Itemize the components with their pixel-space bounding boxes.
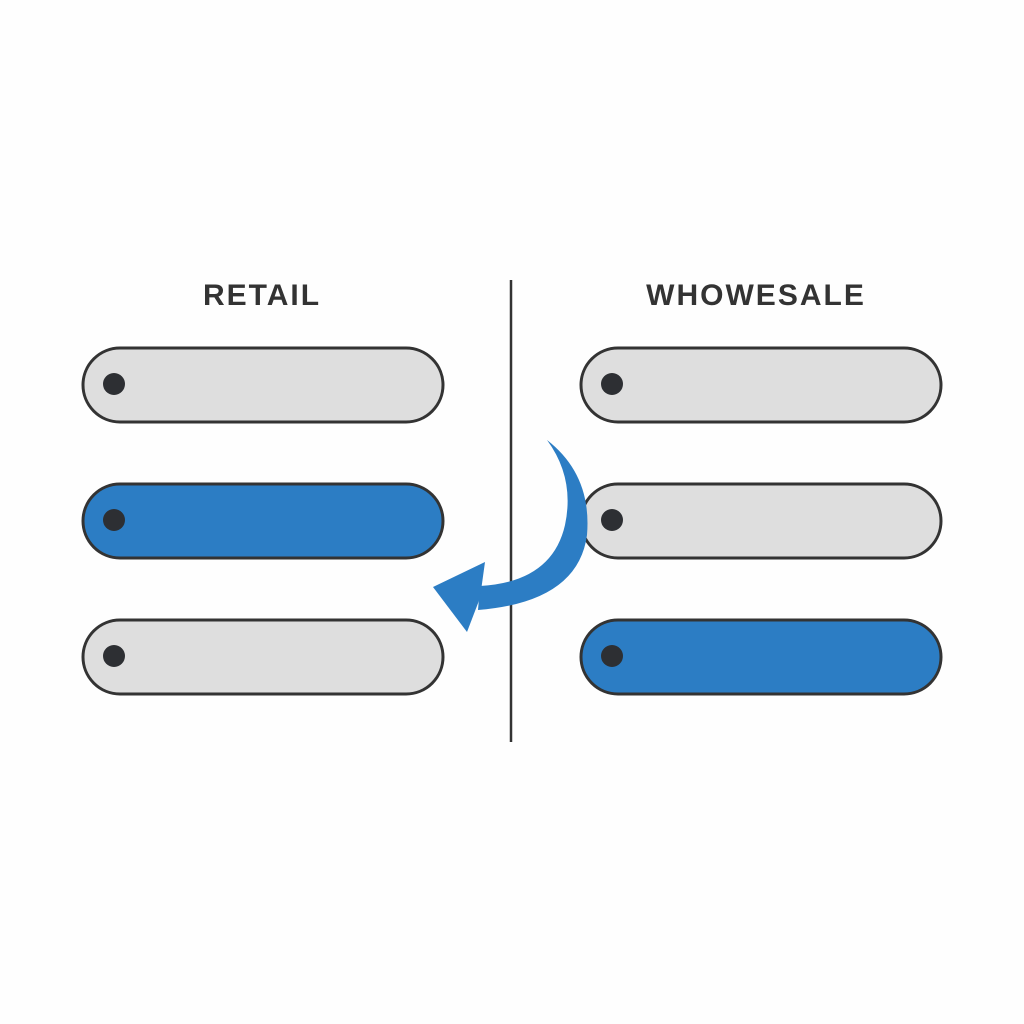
divider line xyxy=(510,280,512,742)
bar: wholesale 3 highlighted xyxy=(581,620,941,694)
bar: wholesale 1 xyxy=(581,348,941,422)
bar: wholesale 2 xyxy=(581,484,941,558)
heading: wholesale: WHOWESALE xyxy=(646,279,866,312)
panel: wholesale bars xyxy=(581,348,941,694)
bar: retail 3 xyxy=(83,620,443,694)
arrow: curved from wholesale to retail xyxy=(433,440,588,632)
heading: retail: RETAIL xyxy=(203,279,321,312)
panel: retail bars xyxy=(83,348,443,694)
bar: retail 2 highlighted xyxy=(83,484,443,558)
bar: retail 1 xyxy=(83,348,443,422)
